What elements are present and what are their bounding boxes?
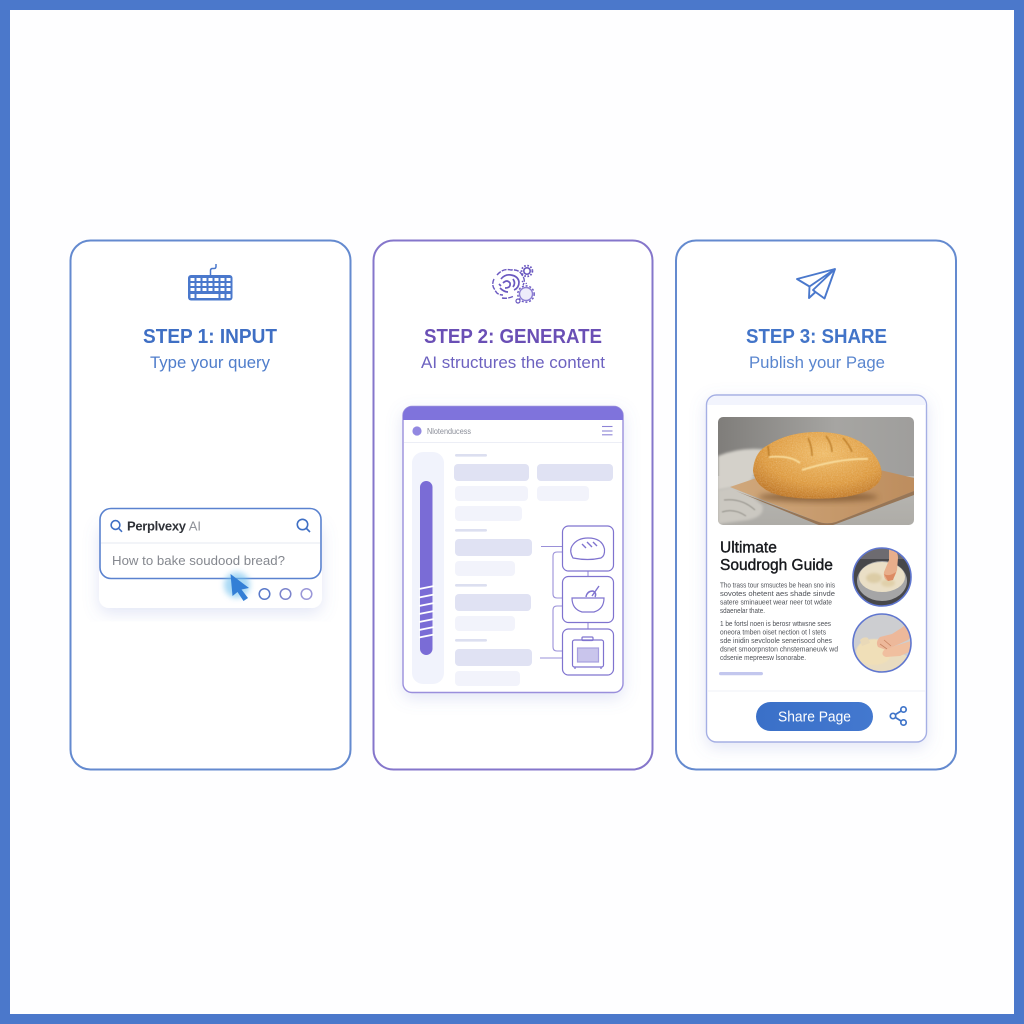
card outline 3: [676, 240, 956, 770]
guide heading: Ultimate: [720, 540, 777, 556]
panel: step 3 share: [676, 240, 956, 770]
guide body text: sdaenelar thate.: [720, 608, 765, 615]
guide body text: sde inidin sevcloole senerisocd ohes: [720, 638, 832, 645]
query text: How to bake soudood bread?: [112, 554, 285, 568]
brand text: PerplvexyAI: [127, 518, 201, 534]
search box: [100, 508, 321, 578]
widget shadow tray: [99, 520, 322, 608]
sidebar: [412, 452, 444, 684]
published page mockup: [706, 395, 926, 742]
button: share page: [756, 702, 873, 731]
icon: search right: [297, 519, 310, 532]
guide body text: dsnet smoorpnston chnstemaneuvk wd: [720, 646, 838, 654]
panel: step 1 input: [70, 240, 350, 770]
heading: step 2: STEP 2: GENERATE: [424, 326, 602, 348]
icon: brain and gears: [493, 266, 534, 303]
heading: step 1: STEP 1: INPUT: [143, 326, 277, 348]
guide body text: oneora tmben oiset nection ot l stets: [720, 630, 826, 636]
process connectors: [540, 546, 588, 658]
guide heading: Soudrogh Guide: [720, 557, 833, 574]
card outline 1: [70, 240, 350, 770]
content skeleton rows: [454, 454, 613, 686]
panel: step 2 generate: [374, 240, 652, 770]
guide body text: satere sminaueet wear neer tot wdate: [720, 600, 832, 606]
guide body text: Tho trass tour smsuctes be hean sno inis: [720, 582, 835, 590]
icon: cursor: [224, 572, 250, 601]
icon box: bread: [562, 526, 614, 571]
photo: bowl of dough: [852, 547, 912, 607]
subheading: step 2: AI structures the content: [421, 353, 605, 372]
icon: hamburger menu: [602, 426, 612, 435]
subheading: step 3: Publish your Page: [749, 353, 885, 372]
search widget: [99, 508, 322, 608]
page window: [706, 395, 926, 742]
photo: kneading hands: [852, 613, 912, 673]
heading: step 3: STEP 3: SHARE: [746, 326, 887, 348]
guide body text: cdsenie mepreesw lsonorabe.: [720, 655, 806, 662]
accent bar: [719, 672, 763, 675]
pagination dots: [259, 589, 312, 599]
icon: search left: [111, 521, 122, 532]
mockup window: [403, 406, 623, 692]
subheading: step 1: Type your query: [150, 353, 270, 372]
icon: share: [890, 707, 906, 725]
button: share page: Share Page: [778, 710, 851, 726]
mockup logo: [412, 426, 422, 436]
mockup header text: Nlotenducess: [427, 427, 471, 436]
app mockup: [403, 406, 623, 692]
page top strip: [708, 396, 926, 405]
mockup title bar: [403, 406, 623, 420]
guide body text: 1 be fortsl noen is berosr wttwsne sees: [720, 621, 831, 628]
icon box: oven: [562, 629, 614, 675]
icon: paper plane: [797, 269, 835, 298]
icon box: mixing bowl: [562, 576, 614, 622]
icon: keyboard: [188, 264, 232, 300]
guide body text: sovotes ohetent aes shade sinvde: [720, 591, 835, 598]
photo: sourdough loaf: [718, 417, 914, 526]
card outline 2: [374, 240, 652, 770]
guide body text: [720, 582, 838, 662]
